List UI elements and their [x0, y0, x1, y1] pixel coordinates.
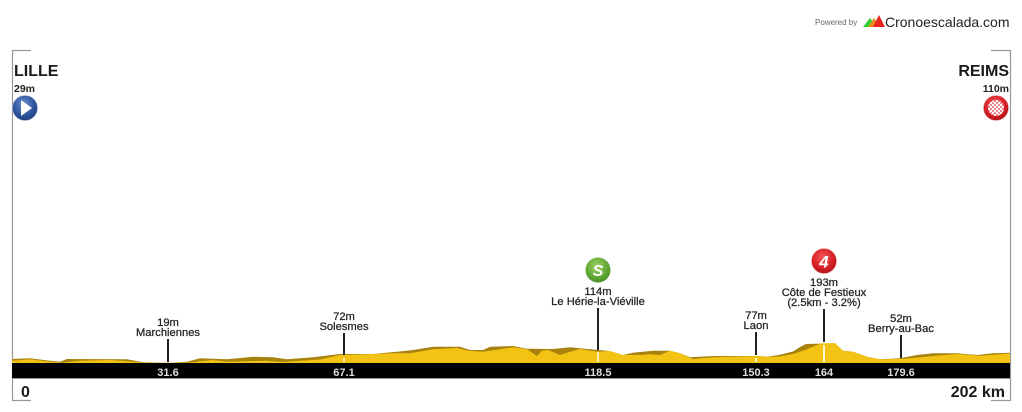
marker: Côte de Festieux climb: Côte de Festieux	[782, 287, 867, 299]
powered by text: Powered by	[815, 18, 857, 27]
elevation profile	[12, 343, 1010, 363]
marker: Marchiennes: Marchiennes	[136, 327, 200, 339]
marker: Berry-au-Bac: 52m	[890, 313, 912, 325]
marker: Le Hérie-la-Viéville sprint: Le Hérie-la-Viéville	[551, 296, 645, 308]
marker: Laon	[742, 310, 770, 379]
icon: start play	[12, 96, 38, 120]
finish label	[958, 63, 1009, 120]
total distance: 202 km	[951, 384, 1005, 401]
marker: Le Hérie-la-Viéville sprint: 118.5	[585, 367, 611, 379]
band lower edge	[12, 378, 1010, 379]
marker: Laon: 77m	[745, 310, 767, 322]
back profile layer	[12, 343, 1010, 363]
marker: Solesmes	[319, 311, 369, 379]
start name: LILLE	[14, 63, 59, 80]
marker: Berry-au-Bac	[868, 313, 934, 379]
icon: sprint badge: S	[593, 263, 604, 280]
powered by logo	[815, 14, 1010, 30]
marker: Marchiennes: 19m	[157, 317, 179, 329]
marker: Côte de Festieux climb	[782, 248, 867, 379]
marker: Solesmes: Solesmes	[319, 321, 369, 333]
marker: Laon: 150.3	[742, 367, 770, 379]
finish name: REIMS	[958, 63, 1009, 80]
marker: Marchiennes	[136, 317, 200, 379]
icon: finish checkered	[984, 96, 1008, 120]
distance band	[12, 363, 1010, 378]
marker: Marchiennes: 31.6	[157, 367, 179, 379]
marker: Côte de Festieux climb: 164	[815, 367, 834, 379]
marker: Côte de Festieux climb: (2.5km - 3.2%)	[787, 297, 861, 309]
start distance: 0	[21, 384, 30, 401]
front profile layer	[12, 343, 1010, 363]
marker: Solesmes: 67.1	[333, 367, 355, 379]
start label	[12, 63, 59, 120]
finish altitude: 110m	[983, 83, 1009, 95]
marker: Berry-au-Bac: Berry-au-Bac	[868, 323, 934, 335]
icon: category 4 badge: 4	[818, 252, 829, 272]
marker: Laon: Laon	[744, 320, 768, 332]
marker: Solesmes: 72m	[333, 311, 355, 323]
marker: Berry-au-Bac: 179.6	[887, 367, 915, 379]
marker: Le Hérie-la-Viéville sprint: 114m	[584, 286, 612, 298]
brand name: Cronoescalada.com	[885, 14, 1010, 30]
logo icon: mountains	[863, 15, 885, 27]
marker: Le Hérie-la-Viéville sprint	[551, 258, 645, 379]
start altitude: 29m	[14, 83, 35, 95]
marker: Côte de Festieux climb: 193m	[810, 277, 838, 289]
